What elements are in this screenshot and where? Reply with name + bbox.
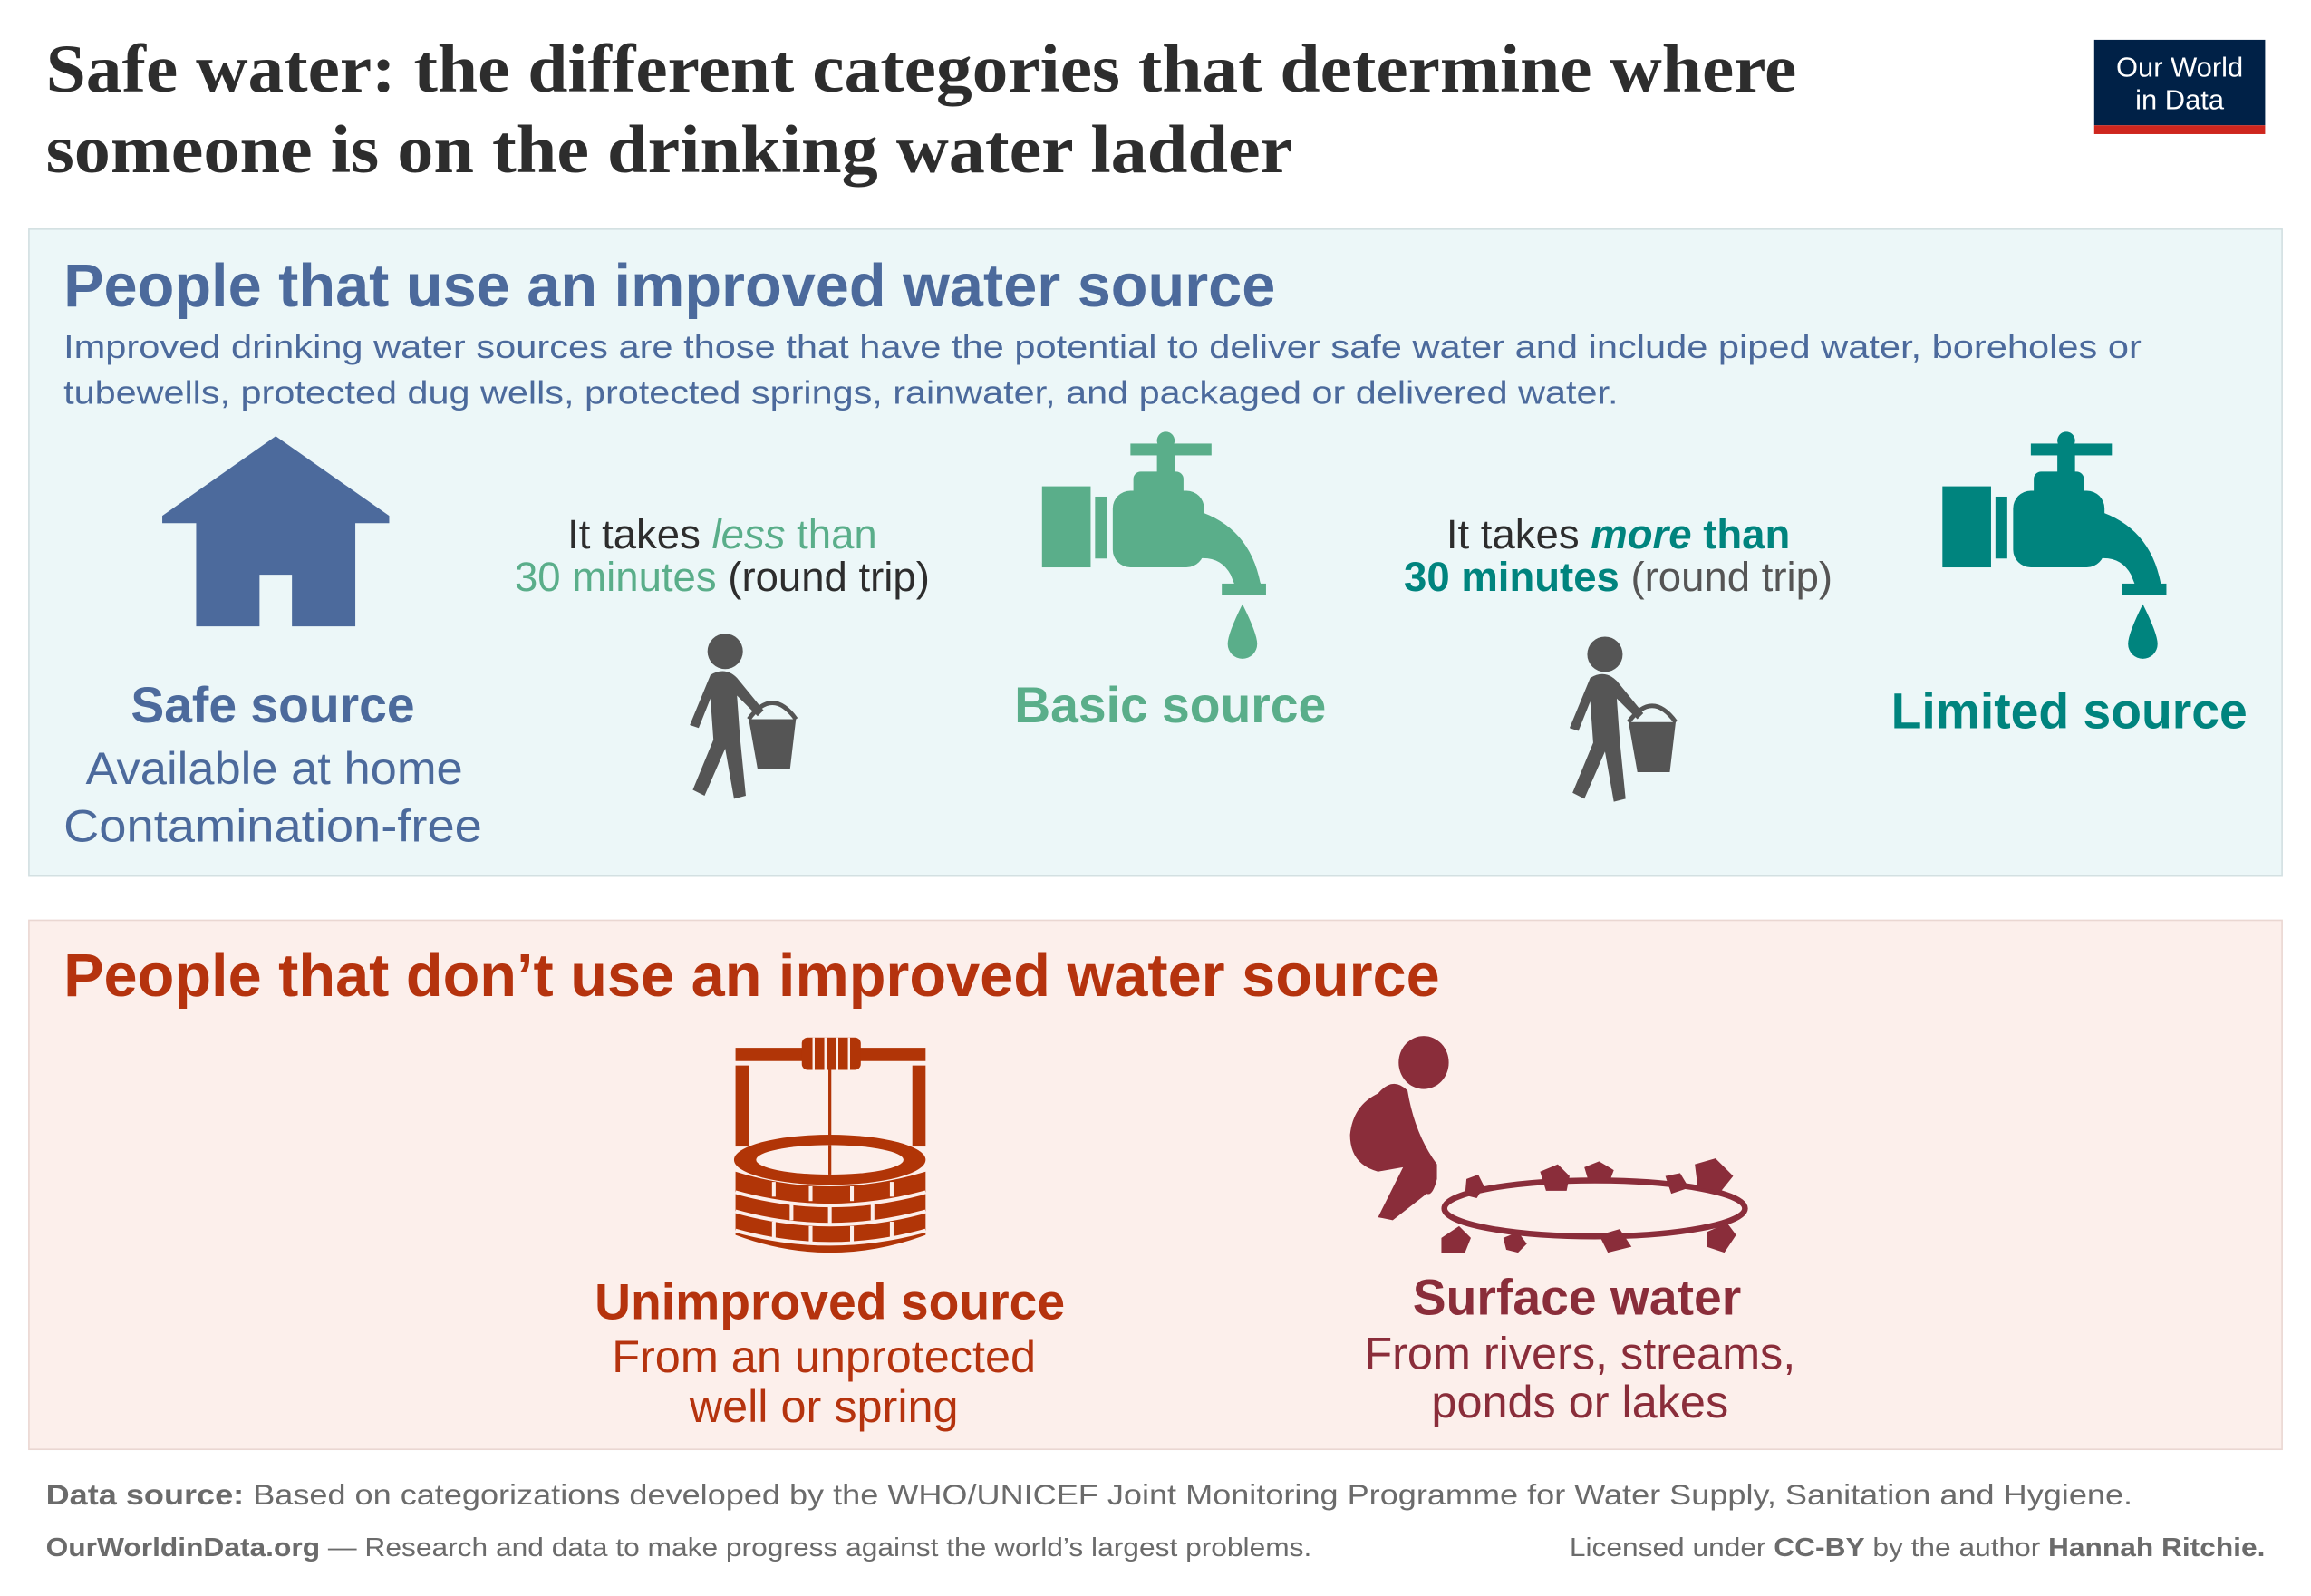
title: Safe water: the different categories that determine where <box>46 32 1796 107</box>
text: unimproved source: From an unprotected <box>612 1330 1036 1382</box>
text: more than 30 minutes: It takes more than <box>1446 511 1790 557</box>
logo: Our World <box>2116 52 2243 83</box>
heading: improved: People that use an improved water source <box>63 253 1275 320</box>
text: surface water <box>1364 1269 1795 1427</box>
text: improved description <box>63 328 2142 411</box>
title: someone is on the drinking water ladder <box>46 112 1292 188</box>
text: safe source: Contamination-free <box>63 799 482 851</box>
text: limited source: Limited source <box>1891 682 2248 739</box>
footer: site and license: OurWorldinData.org — Research and data to make progress against the world’s largest problems. <box>46 1533 1311 1562</box>
text: less than 30 minutes: It takes less than <box>567 511 877 557</box>
text: more than 30 minutes <box>1404 511 1832 600</box>
text: less than 30 minutes: 30 minutes (round trip) <box>515 554 930 600</box>
text: basic source: Basic source <box>1014 677 1326 733</box>
text: unimproved source <box>595 1273 1065 1432</box>
icon: well <box>734 1038 925 1253</box>
panel: unimproved water source <box>29 920 2282 1449</box>
text: safe source: Safe source <box>131 677 415 733</box>
text: unimproved source: Unimproved source <box>595 1273 1065 1330</box>
text: improved description: Improved drinking water sources are those that have the potential to deliver safe water and include piped water, boreholes or <box>63 328 2142 365</box>
text: more than 30 minutes: 30 minutes (round trip) <box>1404 554 1832 600</box>
text: less than 30 minutes <box>515 511 930 600</box>
text: unimproved source: well or spring <box>689 1380 959 1432</box>
heading: unimproved: People that don’t use an improved water source <box>63 943 1440 1010</box>
text: improved description: tubewells, protected dug wells, protected springs, rainwater, and packaged or delivered water. <box>63 374 1619 411</box>
text: safe source <box>63 677 482 851</box>
logo: in Data <box>2135 83 2225 115</box>
icon: person carrying bucket 2 <box>1570 636 1676 802</box>
icon: house <box>162 436 389 626</box>
panel: improved water source <box>29 229 2282 876</box>
icon: limited tap <box>1942 431 2166 659</box>
icon: person carrying bucket <box>690 634 796 798</box>
title <box>46 32 1796 188</box>
logo <box>2094 40 2265 134</box>
text: surface water: ponds or lakes <box>1431 1376 1728 1427</box>
text: surface water: From rivers, streams, <box>1364 1328 1795 1379</box>
text: safe source: Available at home <box>85 742 463 794</box>
footer: site and license: Licensed under CC-BY by the author Hannah Ritchie. <box>1570 1533 2265 1562</box>
footer: data source: Data source: Based on categorizations developed by the WHO/UNICEF Joint Monitoring Programme for Water Supply, Sanitation and Hygiene. <box>46 1478 2132 1511</box>
text: surface water: Surface water <box>1413 1269 1741 1325</box>
footer: site and license <box>46 1533 2265 1562</box>
icon: person at pond <box>1350 1036 1745 1253</box>
icon: basic tap <box>1042 431 1266 659</box>
